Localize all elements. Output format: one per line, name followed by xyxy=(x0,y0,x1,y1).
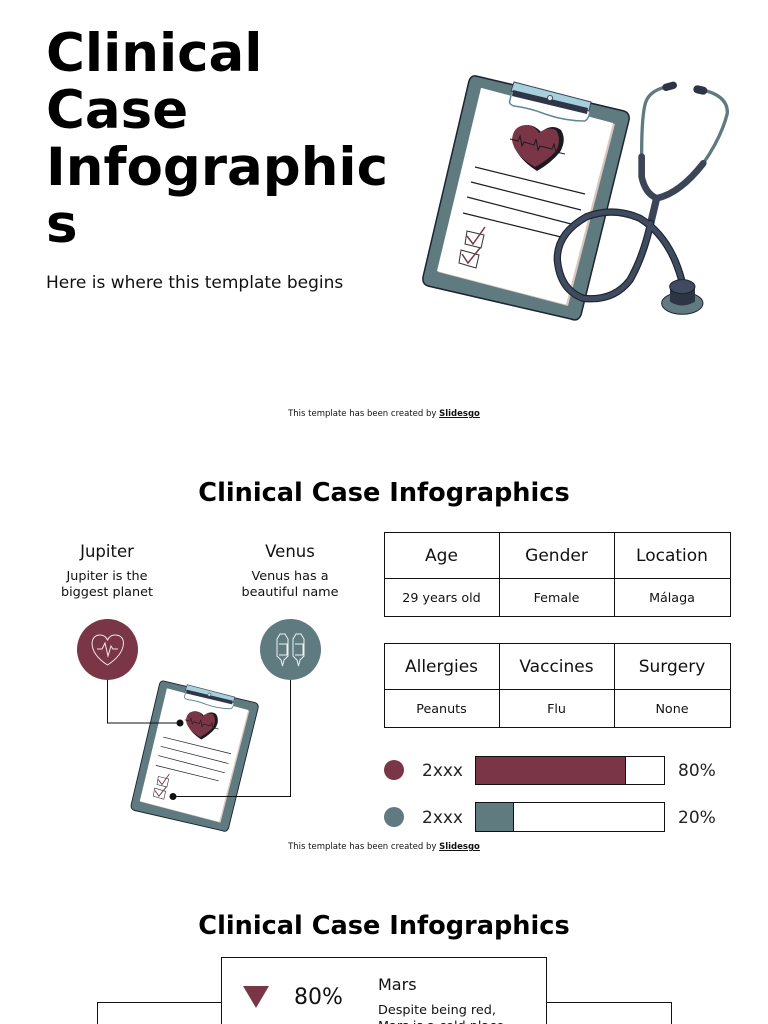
bar chart: 20%: 20% xyxy=(678,808,716,828)
panel: back box xyxy=(97,1002,672,1024)
table: medical history: None xyxy=(655,701,689,716)
table: patient details: Location xyxy=(636,546,708,566)
text: Mars description: Despite being red, xyxy=(378,1003,496,1018)
text block: Jupiter: biggest planet xyxy=(61,584,153,600)
title: Clinical xyxy=(46,23,262,84)
value: 80%: 80% xyxy=(294,985,343,1010)
subtitle: Here is where this template begins xyxy=(46,273,343,293)
panel: Mars card xyxy=(221,957,547,1024)
text block: Venus: beautiful name xyxy=(241,584,339,600)
table: medical history: Flu xyxy=(547,701,566,716)
connector: Venus xyxy=(170,680,290,800)
table: medical history: Allergies xyxy=(405,656,478,676)
icon: stethoscope xyxy=(557,85,727,314)
clipboard illustration xyxy=(131,681,258,831)
bar chart: 80%: 2xxx xyxy=(422,761,463,781)
heading: section 2: Clinical Case Infographics xyxy=(198,478,570,508)
title: Infographic xyxy=(46,137,388,198)
text block: Venus xyxy=(241,542,339,600)
text block: Venus: Venus xyxy=(265,542,315,561)
table: patient details: Female xyxy=(534,590,579,605)
illustration: clipboard and stethoscope xyxy=(422,75,729,321)
title: s xyxy=(46,194,78,255)
table: medical history xyxy=(384,643,730,728)
text block: Jupiter: Jupiter is the xyxy=(66,569,148,584)
title xyxy=(46,23,388,255)
text block: Venus: Venus has a xyxy=(251,569,329,584)
title: Case xyxy=(46,80,188,141)
table: patient details xyxy=(384,532,730,617)
text block: Jupiter: Jupiter xyxy=(80,542,134,561)
bar chart: 20%: 2xxx xyxy=(422,808,463,828)
table: patient details: Málaga xyxy=(649,590,695,605)
text block: Jupiter xyxy=(61,542,153,600)
icon: IV bags xyxy=(260,619,321,680)
icon: heart monitor xyxy=(77,619,138,680)
table: patient details: Age xyxy=(425,546,458,566)
table: patient details: 29 years old xyxy=(402,590,481,605)
footer credit: This template has been created by Slidesgo xyxy=(288,409,480,419)
table: patient details: Gender xyxy=(525,546,588,566)
connector: Jupiter xyxy=(108,680,183,726)
bar chart: 80%: 80% xyxy=(678,761,716,781)
table: medical history: Vaccines xyxy=(519,656,594,676)
text: Mars: Mars xyxy=(378,975,417,994)
footer credit: This template has been created by Slidesgo xyxy=(288,842,480,852)
table: medical history: Surgery xyxy=(639,656,705,676)
icon: down triangle xyxy=(243,986,269,1008)
bar chart: 20% xyxy=(384,802,716,832)
text: Mars description xyxy=(378,1003,504,1024)
table: medical history: Peanuts xyxy=(416,701,467,716)
bar chart: 80% xyxy=(384,756,716,785)
heading: section 3: Clinical Case Infographics xyxy=(198,910,570,940)
